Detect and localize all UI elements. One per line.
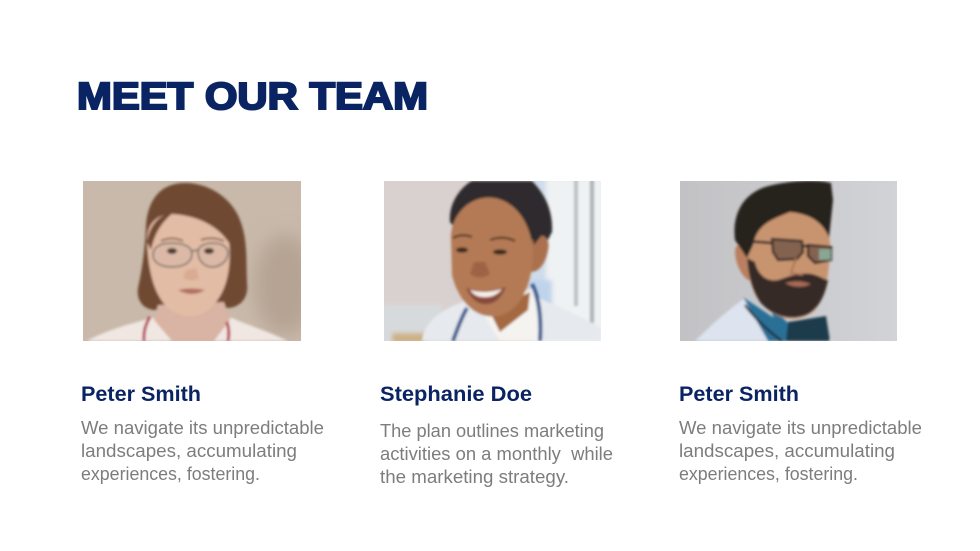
description [679, 418, 922, 484]
name: Stephanie Doe [380, 383, 532, 406]
title: MEET OUR TEAM [77, 76, 428, 118]
description: The plan outlines marketing [380, 421, 604, 441]
description [81, 418, 324, 484]
description: activities on a monthly while [380, 444, 613, 464]
description: We navigate its unpredictable [679, 418, 922, 438]
description: experiences, fostering. [679, 464, 858, 484]
team member 1 text [81, 383, 324, 484]
photo: first team member [83, 181, 315, 341]
description: experiences, fostering. [81, 464, 260, 484]
photo: third team member [680, 181, 897, 341]
team member 2 text [380, 383, 613, 487]
name: Peter Smith [81, 383, 201, 406]
description [380, 421, 613, 487]
description: landscapes, accumulating [81, 441, 297, 461]
photo: second team member [380, 178, 605, 345]
description: the marketing strategy. [380, 467, 569, 487]
description: landscapes, accumulating [679, 441, 895, 461]
description: We navigate its unpredictable [81, 418, 324, 438]
name: Peter Smith [679, 383, 799, 406]
team member 3 text [679, 383, 922, 484]
